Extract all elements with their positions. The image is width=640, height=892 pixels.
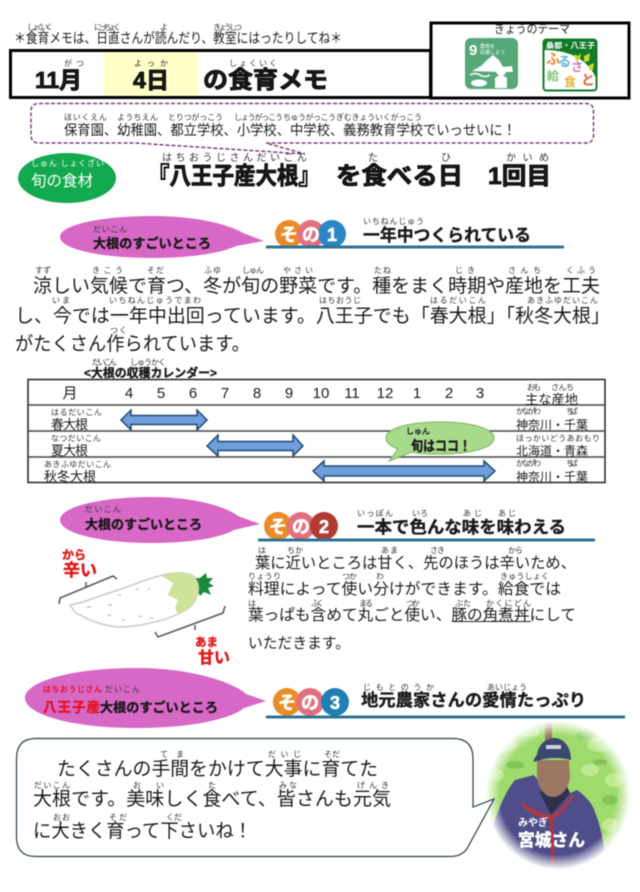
main title: はちおうじさんだいこん: [162, 152, 307, 164]
farmer name label: みやぎ: [518, 816, 548, 829]
farmer speech box: おお: [53, 813, 70, 822]
date header box: 4日: [133, 67, 169, 93]
row: autumn-winter daikon: 秋冬大根: [44, 469, 96, 484]
section 2 body text: わ: [376, 572, 384, 581]
cap: [534, 738, 571, 762]
section 1 speech bubble: 大根のすごいところ: [93, 236, 211, 251]
top note: しょくいく: [27, 23, 53, 32]
icon: furusato school lunch: 桑都・八王子: [546, 40, 596, 50]
farmer speech box: みな: [279, 781, 297, 790]
icon: daikon leaves: [194, 573, 214, 596]
main title: ひ: [441, 153, 451, 164]
month header row: 9: [285, 385, 293, 402]
row: summer daikon: なつだいこん: [51, 434, 101, 443]
main title: [148, 152, 551, 190]
main production area header: おも: [527, 383, 541, 392]
badge: seasonal ingredient: 旬の食材: [31, 172, 93, 190]
icon: daikon root: [70, 573, 198, 627]
month header row: [62, 385, 484, 402]
section 3 speech bubble: [25, 668, 266, 728]
section 1 body text: すず: [35, 265, 51, 275]
section 2 body text: りょうり: [248, 572, 281, 581]
icon: daikon speckles: [87, 589, 153, 620]
icon: SDG goal 9: [465, 38, 518, 89]
main title: かいめ: [506, 152, 549, 164]
section 2 body text: つか: [342, 572, 357, 581]
month header row: 10: [313, 385, 329, 402]
farmer name label: [518, 816, 585, 850]
theme panel: きょうのテーマ: [494, 22, 570, 36]
section 2 heading: 一本で色んな味を味わえる: [357, 517, 566, 537]
icon: SDG goal 9: 9: [469, 42, 477, 59]
section 3 badge: 3: [330, 693, 340, 713]
section 1 body text: いま: [52, 296, 70, 305]
section 2 heading: いろ: [412, 509, 428, 518]
month header row: 11: [344, 385, 360, 402]
month header row: 3: [476, 385, 484, 402]
section 3 badge: [273, 688, 349, 716]
section 2 body text: かくにどん: [486, 599, 531, 608]
section 3 heading: 地元農家さんの愛情たっぷり: [361, 690, 586, 710]
dashed announcement callout: しょうがっこう: [234, 112, 283, 122]
badge: seasonal ingredient: [18, 153, 116, 203]
section 2 body text: 葉に近いところは甘く、先のほうは辛いため、: [255, 555, 576, 572]
farmer speech box: くだ: [166, 813, 182, 822]
section 1 body text: はちおうじ: [319, 296, 361, 305]
dashed announcement callout: ほいくえん: [64, 113, 107, 122]
top note: ＊食育メモは、日直さんが読んだり、教室にはったりしてね＊: [14, 30, 342, 46]
theme panel: [431, 22, 629, 98]
dashed announcement callout: [31, 104, 594, 154]
section 1 body text: しゅん: [242, 266, 264, 275]
section 1 body text: たね: [374, 266, 391, 275]
section 1 badge: の: [302, 225, 320, 245]
section 3 speech bubble: はちおうじさん: [43, 684, 102, 694]
section 2 speech bubble: だいこん: [85, 505, 121, 514]
label: sweet: あま: [195, 636, 218, 649]
section 2 badge: そ: [269, 517, 287, 537]
month header row: 1: [413, 385, 421, 402]
harvest calendar title: しゅうかく: [130, 358, 166, 367]
section 3 badge: の: [301, 693, 319, 713]
section 2 heading: [258, 509, 595, 542]
date header box: よっか: [134, 59, 168, 68]
month header row: 6: [189, 385, 197, 402]
section 3 heading: あいじょう: [487, 683, 527, 692]
main title: た: [368, 152, 378, 164]
main production area header: [525, 383, 578, 407]
callout: season is here: [386, 422, 494, 461]
section 1 badge: 1: [327, 225, 337, 245]
row: autumn-winter daikon: かながわ: [516, 458, 541, 468]
section 2 body text: は: [248, 599, 256, 608]
farmer speech box: だいじ: [268, 750, 301, 759]
row: autumn-winter daikon: あきふゆだいこん: [44, 460, 111, 469]
icon: daikon green shoulder: [162, 573, 198, 614]
row: spring daikon: かながわ: [516, 406, 541, 416]
top note: きょうしつ: [213, 23, 242, 32]
section 1 body text: そだ: [147, 266, 164, 275]
label: sweet: 甘い: [198, 649, 230, 667]
section 1 body text: はるだいこん: [430, 296, 486, 305]
dashed announcement callout: ようちえん: [117, 113, 158, 122]
section 1 body text: [15, 265, 610, 355]
row: summer daikon: 北海道・青森: [516, 443, 588, 458]
section 2 heading: あじ: [498, 509, 516, 518]
section 3 heading: [266, 683, 625, 718]
label: pungent: から: [62, 548, 86, 562]
row: spring daikon: 神奈川・千葉: [516, 417, 588, 432]
icon: furusato school lunch: と: [581, 72, 595, 88]
dashed announcement callout: ちゅうがっこう: [283, 112, 336, 122]
illustration: daikon with taste brackets: [59, 548, 230, 667]
date header box: の食育メモ: [203, 67, 328, 94]
month header row: 月: [62, 385, 78, 402]
section 1 badge: そ: [280, 225, 298, 245]
row: summer daikon: 夏大根: [51, 443, 88, 458]
callout: season is here: しゅん: [406, 427, 430, 436]
section 1 body text: じき: [455, 266, 475, 275]
icon: furusato school lunch: 食: [564, 74, 576, 89]
section 1 body text: やさい: [283, 266, 313, 275]
section 1 body text: 涼しい気候で育つ、冬が旬の野菜です。種をまく時期や産地を工夫: [33, 275, 600, 297]
month header row: 12: [377, 385, 393, 402]
face: [537, 760, 570, 797]
main production area header: さんち: [551, 383, 574, 392]
row: summer daikon: [51, 434, 600, 458]
top note: よ: [160, 23, 168, 32]
section 2 body text: あま: [381, 546, 398, 555]
section 2 badge: の: [292, 517, 310, 537]
row: summer daikon: ほっかいどうあおもり: [516, 434, 600, 443]
top note: [14, 23, 342, 46]
section 2 body text: 葉っぱも含めて丸ごと使い、豚の角煮丼にして: [248, 607, 576, 624]
row: autumn-winter daikon: 神奈川・千葉: [516, 469, 588, 484]
dashed announcement callout: とりつがっこう: [168, 112, 223, 122]
section 2 body text: [248, 546, 576, 652]
section 2 body text: まる: [359, 599, 373, 608]
top note: にっちょく: [94, 23, 121, 32]
dashed announcement callout: 保育園、幼稚園、都立学校、小学校、中学校、義務教育学校でいっせいに！: [64, 122, 516, 138]
section 1 body text: くふう: [566, 266, 596, 275]
month header row: 4: [125, 385, 133, 402]
section 1 body text: つく: [110, 326, 127, 335]
farmer speech box: だいこん: [34, 781, 70, 790]
icon: furusato school lunch: ふ: [546, 51, 560, 67]
harvest calendar title: <大根の収穫カレンダー>: [84, 365, 217, 380]
section 1 body text: あきふゆだいこん: [527, 296, 598, 305]
section 3 speech bubble: だいこん: [105, 685, 140, 694]
dashed announcement callout: ぎむきょういくがっこう: [336, 112, 422, 122]
section 1 badge: [275, 220, 346, 248]
section 1 body text: がたくさん作られています。: [15, 333, 250, 355]
icon: furusato school lunch: 給: [547, 68, 559, 83]
month header row: 8: [253, 385, 261, 402]
section 2 body text: ちか: [287, 546, 303, 555]
icon: SDG goal 9: 応援しよう: [480, 49, 505, 56]
badge: seasonal ingredient: しゅん しょくざい: [31, 158, 104, 168]
row: autumn-winter daikon: ちば: [566, 459, 578, 468]
harvest calendar title: だいこん: [92, 358, 117, 367]
farmer speech box: 大根です。美味しく食べて、皆さんも元気: [33, 788, 391, 810]
section 2 speech bubble: 大根のすごいところ: [85, 517, 202, 532]
section 1 body text: いちねんじゅうでまわ: [109, 296, 201, 305]
section 2 body text: ぶた: [455, 599, 471, 608]
month header row: 7: [221, 385, 229, 402]
farmer speech box: たくさんの手間をかけて大事に育てた: [57, 758, 378, 780]
row: spring daikon: [51, 406, 588, 432]
section 3 speech bubble: 八王子産: [43, 699, 100, 715]
section 2 body text: ふく: [311, 599, 324, 608]
harvest calendar title: [84, 358, 217, 380]
section 2 badge: [264, 512, 338, 540]
section 2 body text: きゅうしょく: [500, 572, 549, 581]
farmer speech box: おい: [133, 781, 164, 790]
section 1 speech bubble: だいこん: [93, 225, 127, 234]
main title: を食べる日: [336, 163, 463, 190]
bracket: sweet end: [155, 606, 225, 637]
section 2 body text: つか: [406, 599, 420, 608]
farmer name label: 宮城さん: [518, 830, 585, 850]
callout: season is here: 旬はココ！: [411, 438, 471, 454]
main title: 『八王子産大根』: [148, 163, 320, 190]
harvest calendar table: [28, 380, 605, 484]
section 1 speech bubble: [60, 216, 264, 258]
icon: furusato school lunch: さ: [571, 60, 583, 74]
row: spring daikon: ちば: [566, 407, 578, 416]
row: autumn-winter daikon: [44, 458, 588, 484]
section 2 heading: いっぽん: [357, 509, 393, 518]
icon: SDG goal 9: 農地を: [480, 43, 495, 50]
date header box: しょくいく: [229, 59, 277, 68]
date header box: [10, 50, 430, 98]
section 3 speech bubble: 大根のすごいところ: [100, 700, 218, 715]
date header box: 11月: [35, 67, 82, 93]
month header row: 5: [157, 385, 165, 402]
icon: furusato school lunch: [544, 40, 596, 90]
icon: furusato school lunch: る: [558, 54, 571, 69]
section 1 heading: いちねんじゅう: [363, 217, 424, 226]
row: spring daikon: 春大根: [51, 417, 88, 432]
section 2 body text: さき: [430, 546, 445, 555]
month header row: 2: [445, 385, 453, 402]
section 1 heading: [266, 217, 564, 248]
label: pungent: [62, 548, 97, 580]
farmer speech box: [16, 738, 494, 856]
section 2 body text: いただきます。: [248, 635, 350, 652]
section 3 badge: そ: [278, 693, 296, 713]
date header box: がつ: [64, 58, 84, 68]
farmer photo: [486, 722, 630, 869]
bracket: pungent end: [59, 576, 117, 604]
section 3 heading: じもとのうか: [363, 683, 434, 692]
section 1 heading: 一年中つくられている: [363, 225, 531, 245]
section 1 body text: さんち: [508, 266, 541, 275]
section 2 heading: あじ: [463, 509, 482, 518]
jacket: [490, 775, 604, 875]
section 1 body text: ふゆ: [204, 266, 221, 275]
farmer speech box: そだ: [109, 813, 127, 822]
section 2 body text: は: [258, 546, 266, 555]
label: sweet: [195, 636, 230, 667]
farmer speech box: に大きく育って下さいね！: [33, 820, 252, 842]
main production area header: 主な産地: [525, 392, 578, 407]
section 2 speech bubble: [60, 497, 260, 543]
farmer speech box: てま: [160, 750, 184, 759]
farmer speech box: そだ: [324, 750, 340, 759]
section 2 body text: から: [508, 546, 523, 555]
row: spring daikon: はるだいこん: [51, 408, 102, 417]
section 1 body text: きこう: [92, 266, 123, 275]
section 1 body text: し、今では一年中出回っています。八王子でも「春大根」「秋冬大根」: [15, 305, 610, 327]
label: pungent: 辛い: [63, 561, 97, 580]
farmer speech box: た: [208, 781, 216, 790]
farmer speech box: げんき: [357, 781, 389, 790]
section 2 body text: 料理によって使い分けができます。給食では: [248, 581, 561, 598]
main title: 1回目: [488, 163, 551, 190]
section 2 badge: 2: [319, 517, 329, 537]
